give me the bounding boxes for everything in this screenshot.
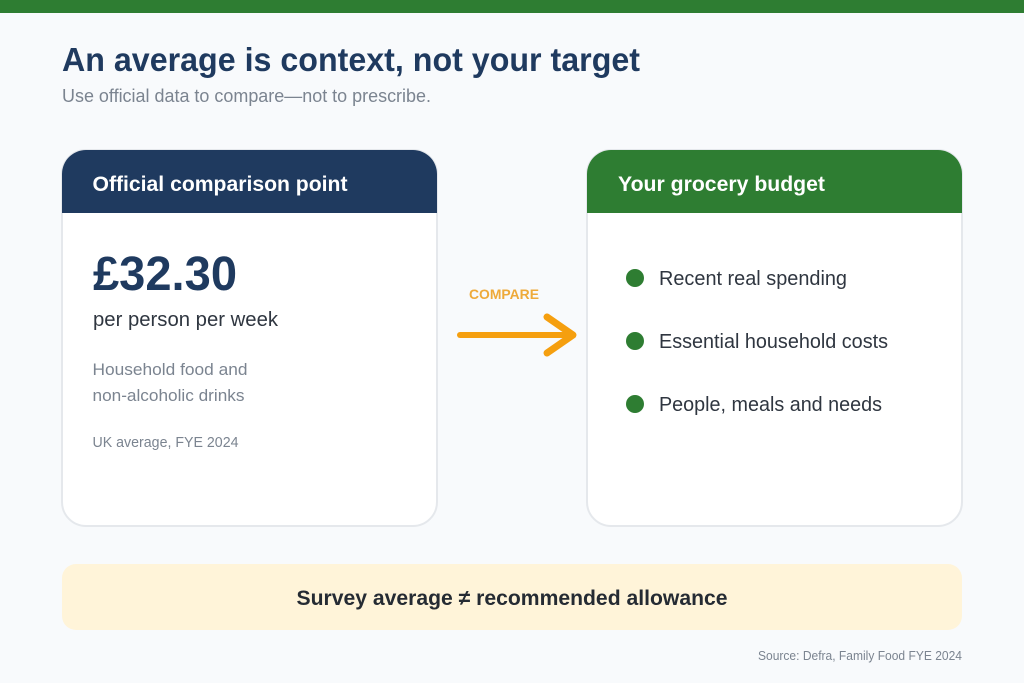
panel header: your grocery budget — [587, 150, 962, 213]
figure scope note: UK average, FYE 2024 — [92, 435, 238, 451]
panel header: your grocery budget: Your grocery budget — [618, 173, 825, 196]
figure unit: per person per week — [93, 309, 279, 331]
source note: Source: Defra, Family Food FYE 2024 — [758, 649, 962, 663]
callout banner — [62, 564, 962, 630]
arrow — [460, 317, 573, 353]
list item: people, meals and needs: People, meals and needs — [659, 394, 882, 416]
panel: official comparison point — [62, 150, 437, 526]
panel header: official comparison point — [62, 150, 437, 213]
title: An average is context, not your target — [62, 41, 640, 78]
list item: essential household costs: Essential household costs — [659, 331, 888, 353]
callout banner: Survey average ≠ recommended allowance — [296, 586, 728, 610]
key figure: £32.30 — [93, 248, 237, 301]
subtitle: Use official data to compare—not to prescribe. — [62, 86, 431, 106]
panel: your grocery budget — [587, 150, 962, 526]
compare label: COMPARE — [469, 286, 539, 302]
list item: recent real spending: Recent real spending — [659, 268, 847, 290]
top accent bar — [0, 0, 1024, 13]
figure description: non-alcoholic drinks — [92, 387, 245, 405]
figure description: Household food and — [92, 361, 248, 379]
panel header: official comparison point: Official comparison point — [92, 173, 348, 196]
figure description — [92, 361, 248, 405]
